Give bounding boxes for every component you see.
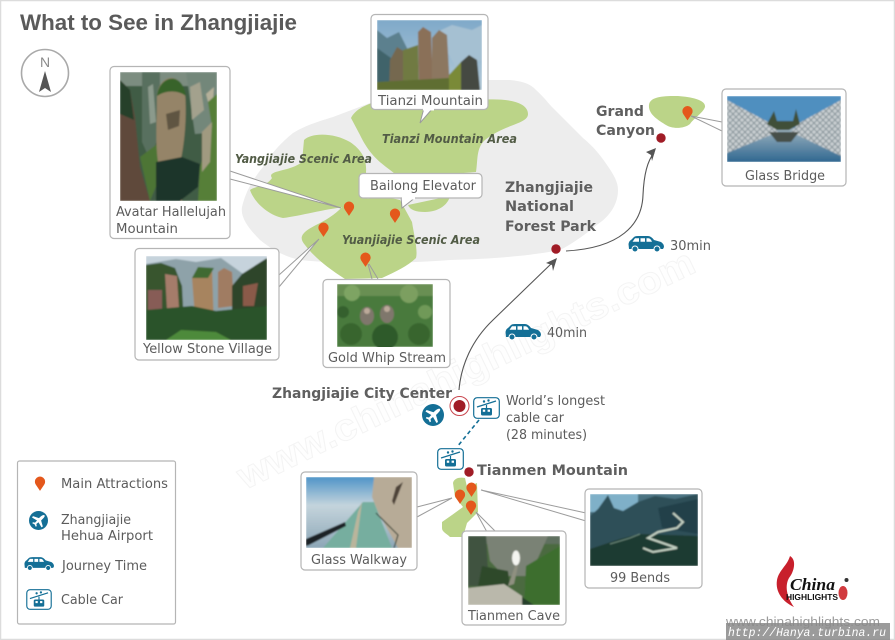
place: Grand Canyon: Grand <box>596 104 644 120</box>
legend item: cable car <box>27 590 124 609</box>
callout: Bailong Elevator: Bailong Elevator <box>370 179 477 194</box>
region: Tianmen Mountain <box>442 478 478 537</box>
card: Avatar Hallelujah Mountain <box>110 66 230 238</box>
legend item: cable car: Cable Car <box>61 593 124 608</box>
watermark: www.chinahighlights.com <box>230 241 702 499</box>
place: Grand Canyon: Canyon <box>596 123 655 139</box>
leader: Tianmen Cave <box>476 512 496 532</box>
region: grey park outline <box>242 80 618 263</box>
legend <box>18 461 176 624</box>
photo: Avatar Hallelujah Mountain <box>120 72 217 201</box>
icon: cable car lower station <box>438 449 463 469</box>
place: Grand Canyon <box>596 104 666 143</box>
card: Glass Bridge <box>722 89 846 186</box>
card: Gold Whip Stream: Gold Whip Stream <box>328 351 446 366</box>
photo: Glass Bridge <box>727 96 841 162</box>
source stamp: http://Hanya.turbina.ru <box>728 626 886 640</box>
region: Yuanjiajie east lobe <box>408 196 450 212</box>
journey time: 40min: 40min <box>547 326 587 341</box>
logo: China Highlights: China <box>790 575 836 594</box>
card: Avatar Hallelujah Mountain: Mountain <box>116 222 178 237</box>
legend item: journey time: Journey Time <box>61 559 147 574</box>
journey time: 30min: 30min <box>670 239 711 254</box>
leader: Glass Walkway <box>417 498 452 517</box>
journey time: 30min <box>628 236 711 254</box>
logo: China Highlights: HIGHLIGHTS <box>786 593 839 602</box>
leader: Glass Bridge <box>691 116 722 131</box>
region: Grand Canyon <box>649 96 705 128</box>
legend item: main attractions: Main Attractions <box>61 477 168 492</box>
photo: Yellow Stone Village <box>146 256 267 340</box>
place: Zhangjiajie City Center <box>272 386 469 416</box>
legend item: journey time <box>24 557 147 574</box>
map: national park region <box>242 80 705 537</box>
note: world's longest cable car: cable car <box>506 411 565 426</box>
icon: north compass <box>22 50 68 96</box>
route: cable car <box>457 420 479 447</box>
icon: cable car upper station <box>474 398 499 418</box>
region: Tianzi Mountain Area <box>351 99 528 178</box>
card: 99 Bends: 99 Bends <box>610 571 670 586</box>
photo: Glass Walkway <box>306 477 412 548</box>
legend item: airport <box>29 511 153 544</box>
photo: Tianzi Mountain <box>377 20 482 90</box>
card: Tianmen Cave: Tianmen Cave <box>467 609 560 624</box>
place: Tianmen Mountain: Tianmen Mountain <box>477 463 628 479</box>
area label: Yangjiajie Scenic Area: Yangjiajie Scenic Area <box>235 151 372 166</box>
card: Avatar Hallelujah Mountain: Avatar Hallelujah <box>116 205 226 220</box>
card: Glass Bridge: Glass Bridge <box>745 169 825 184</box>
card: Tianzi Mountain: Tianzi Mountain <box>377 94 483 109</box>
leader: Gold Whip Stream <box>368 264 378 279</box>
icon: airport <box>422 404 444 426</box>
logo: China Highlights <box>777 556 848 607</box>
note: world's longest cable car <box>506 394 605 443</box>
leader: 99 Bends <box>481 490 586 521</box>
legend item: airport: Zhangjiajie <box>61 513 131 528</box>
place: Zhangjiajie National Forest Park <box>505 180 597 254</box>
area label: Yuanjiajie Scenic Area: Yuanjiajie Scenic Area <box>342 232 480 247</box>
callout: Bailong Elevator <box>359 174 482 208</box>
card: 99 Bends <box>585 489 702 588</box>
place: Zhangjiajie National Forest Park: National <box>505 199 574 215</box>
legend item: airport: Hehua Airport <box>61 529 153 544</box>
route: national forest park to Grand Canyon <box>566 148 656 251</box>
region: Yangjiajie Scenic Area <box>250 135 368 218</box>
photo: 99 Bends <box>590 494 698 566</box>
leader: Avatar Hallelujah <box>230 171 341 208</box>
card: Glass Walkway <box>301 472 417 570</box>
card: Tianmen Cave <box>462 531 566 625</box>
area label: Tianzi Mountain Area: Tianzi Mountain Area <box>382 131 517 146</box>
card: Glass Walkway: Glass Walkway <box>311 553 407 568</box>
pins: main attractions <box>318 106 693 515</box>
title: What to See in Zhangjiajie <box>20 10 297 35</box>
card: Yellow Stone Village: Yellow Stone Village <box>142 342 272 357</box>
note: world's longest cable car: World’s longest <box>506 394 605 409</box>
place: Zhangjiajie City Center: Zhangjiajie City Center <box>272 386 452 402</box>
photo: Tianmen Cave <box>468 536 560 605</box>
card: Gold Whip Stream <box>323 280 450 368</box>
photo: Gold Whip Stream <box>337 284 433 347</box>
region: Yuanjiajie Scenic Area <box>302 198 417 279</box>
route: city center to national forest park <box>459 258 557 390</box>
card: Yellow Stone Village <box>135 248 279 360</box>
journey time: 40min <box>506 324 587 341</box>
icon: north compass: N <box>40 54 50 70</box>
place: Zhangjiajie National Forest Park: Forest Park <box>505 219 597 235</box>
card: Tianzi Mountain <box>371 14 488 123</box>
note: world's longest cable car: (28 minutes) <box>506 428 587 443</box>
website url: www.chinahighlights.com <box>725 614 880 629</box>
leader: Yellow Stone Village <box>279 239 319 287</box>
place: Zhangjiajie National Forest Park: Zhangjiajie <box>505 180 593 196</box>
